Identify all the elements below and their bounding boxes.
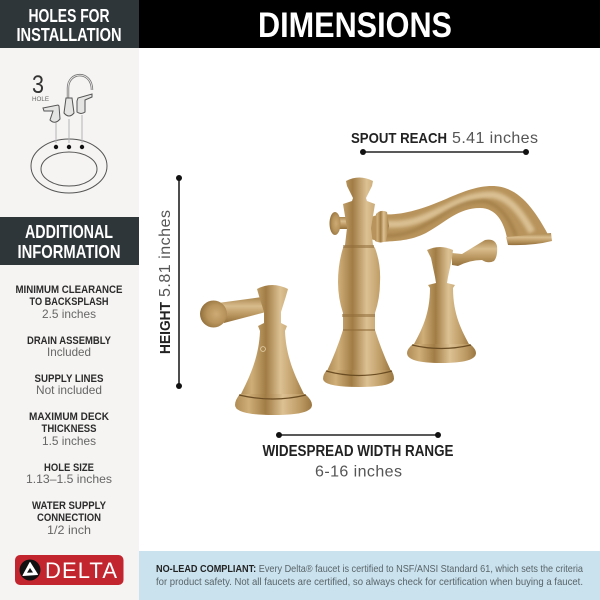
dimension: spout reach: SPOUT REACH: [351, 130, 447, 147]
dimension: widespread width range: WIDESPREAD WIDTH RANGE: [262, 443, 454, 460]
icon: three-hole faucet and sink: [31, 71, 107, 193]
faucet: left lever: [200, 297, 266, 328]
spec: drain assembly: [27, 335, 111, 359]
sidebar: [0, 0, 139, 600]
spec: maximum deck thickness: MAXIMUM DECK: [29, 411, 109, 423]
spec: hole size: HOLE SIZE: [44, 462, 94, 474]
dimension: spout reach: 5.41 inches: [452, 130, 538, 147]
spec: drain assembly: DRAIN ASSEMBLY: [27, 335, 111, 347]
logo: Delta: [15, 555, 124, 585]
faucet: right handle: [407, 247, 476, 363]
spec: maximum deck thickness: 1.5 inches: [42, 434, 96, 448]
icon: three-hole faucet and sink: 3: [32, 71, 44, 99]
title bar: [139, 0, 600, 48]
spec: minimum clearance: MINIMUM CLEARANCE: [16, 284, 122, 296]
dimension: widespread width range: [262, 432, 454, 480]
spec: drain assembly: Included: [47, 345, 91, 359]
dimension: widespread width range: 6-16 inches: [315, 464, 402, 480]
faucet: center body: [323, 178, 394, 387]
spec: hole size: [26, 462, 112, 486]
faucet: center knob: [330, 212, 348, 235]
spec: supply lines: SUPPLY LINES: [34, 373, 104, 385]
heading: additional information: [0, 217, 139, 265]
icon: three-hole faucet and sink: HOLE: [32, 96, 50, 103]
spec: supply lines: [34, 373, 104, 397]
spec: maximum deck thickness: THICKNESS: [42, 423, 96, 435]
note: no-lead compliant: [139, 551, 600, 600]
spec: supply lines: Not included: [36, 383, 102, 397]
logo: Delta: DELTA: [45, 558, 117, 583]
spec: maximum deck thickness: [29, 411, 109, 448]
spec: water supply connection: 1/2 inch: [47, 523, 91, 537]
heading: holes for installation: [0, 0, 139, 48]
spec: minimum clearance: 2.5 inches: [42, 307, 96, 321]
spec: minimum clearance: TO BACKSPLASH: [30, 296, 108, 308]
faucet: left handle: [235, 285, 312, 415]
dimension: spout reach: [351, 130, 538, 155]
heading: additional information: INFORMATION: [18, 241, 120, 262]
faucet: right lever: [452, 240, 497, 266]
title bar: DIMENSIONS: [258, 6, 452, 45]
spec: minimum clearance: [16, 284, 122, 321]
spec: water supply connection: [32, 500, 106, 537]
dimension: height: [157, 175, 182, 389]
heading: additional information: ADDITIONAL: [25, 221, 113, 242]
dimension: height: 5.81 inches: [157, 210, 174, 297]
spec: water supply connection: WATER SUPPLY: [32, 500, 106, 512]
note: no-lead compliant: for product safety. Not all faucets are certified, so always check for certification when buying a faucet.: [156, 577, 583, 588]
heading: holes for installation: HOLES FOR: [28, 5, 110, 26]
faucet image: [200, 178, 552, 415]
dimension: height: HEIGHT: [157, 302, 174, 354]
spec: hole size: 1.13–1.5 inches: [26, 472, 112, 486]
faucet: spout: [368, 186, 552, 245]
spec: water supply connection: CONNECTION: [37, 512, 101, 524]
heading: holes for installation: INSTALLATION: [16, 24, 122, 45]
